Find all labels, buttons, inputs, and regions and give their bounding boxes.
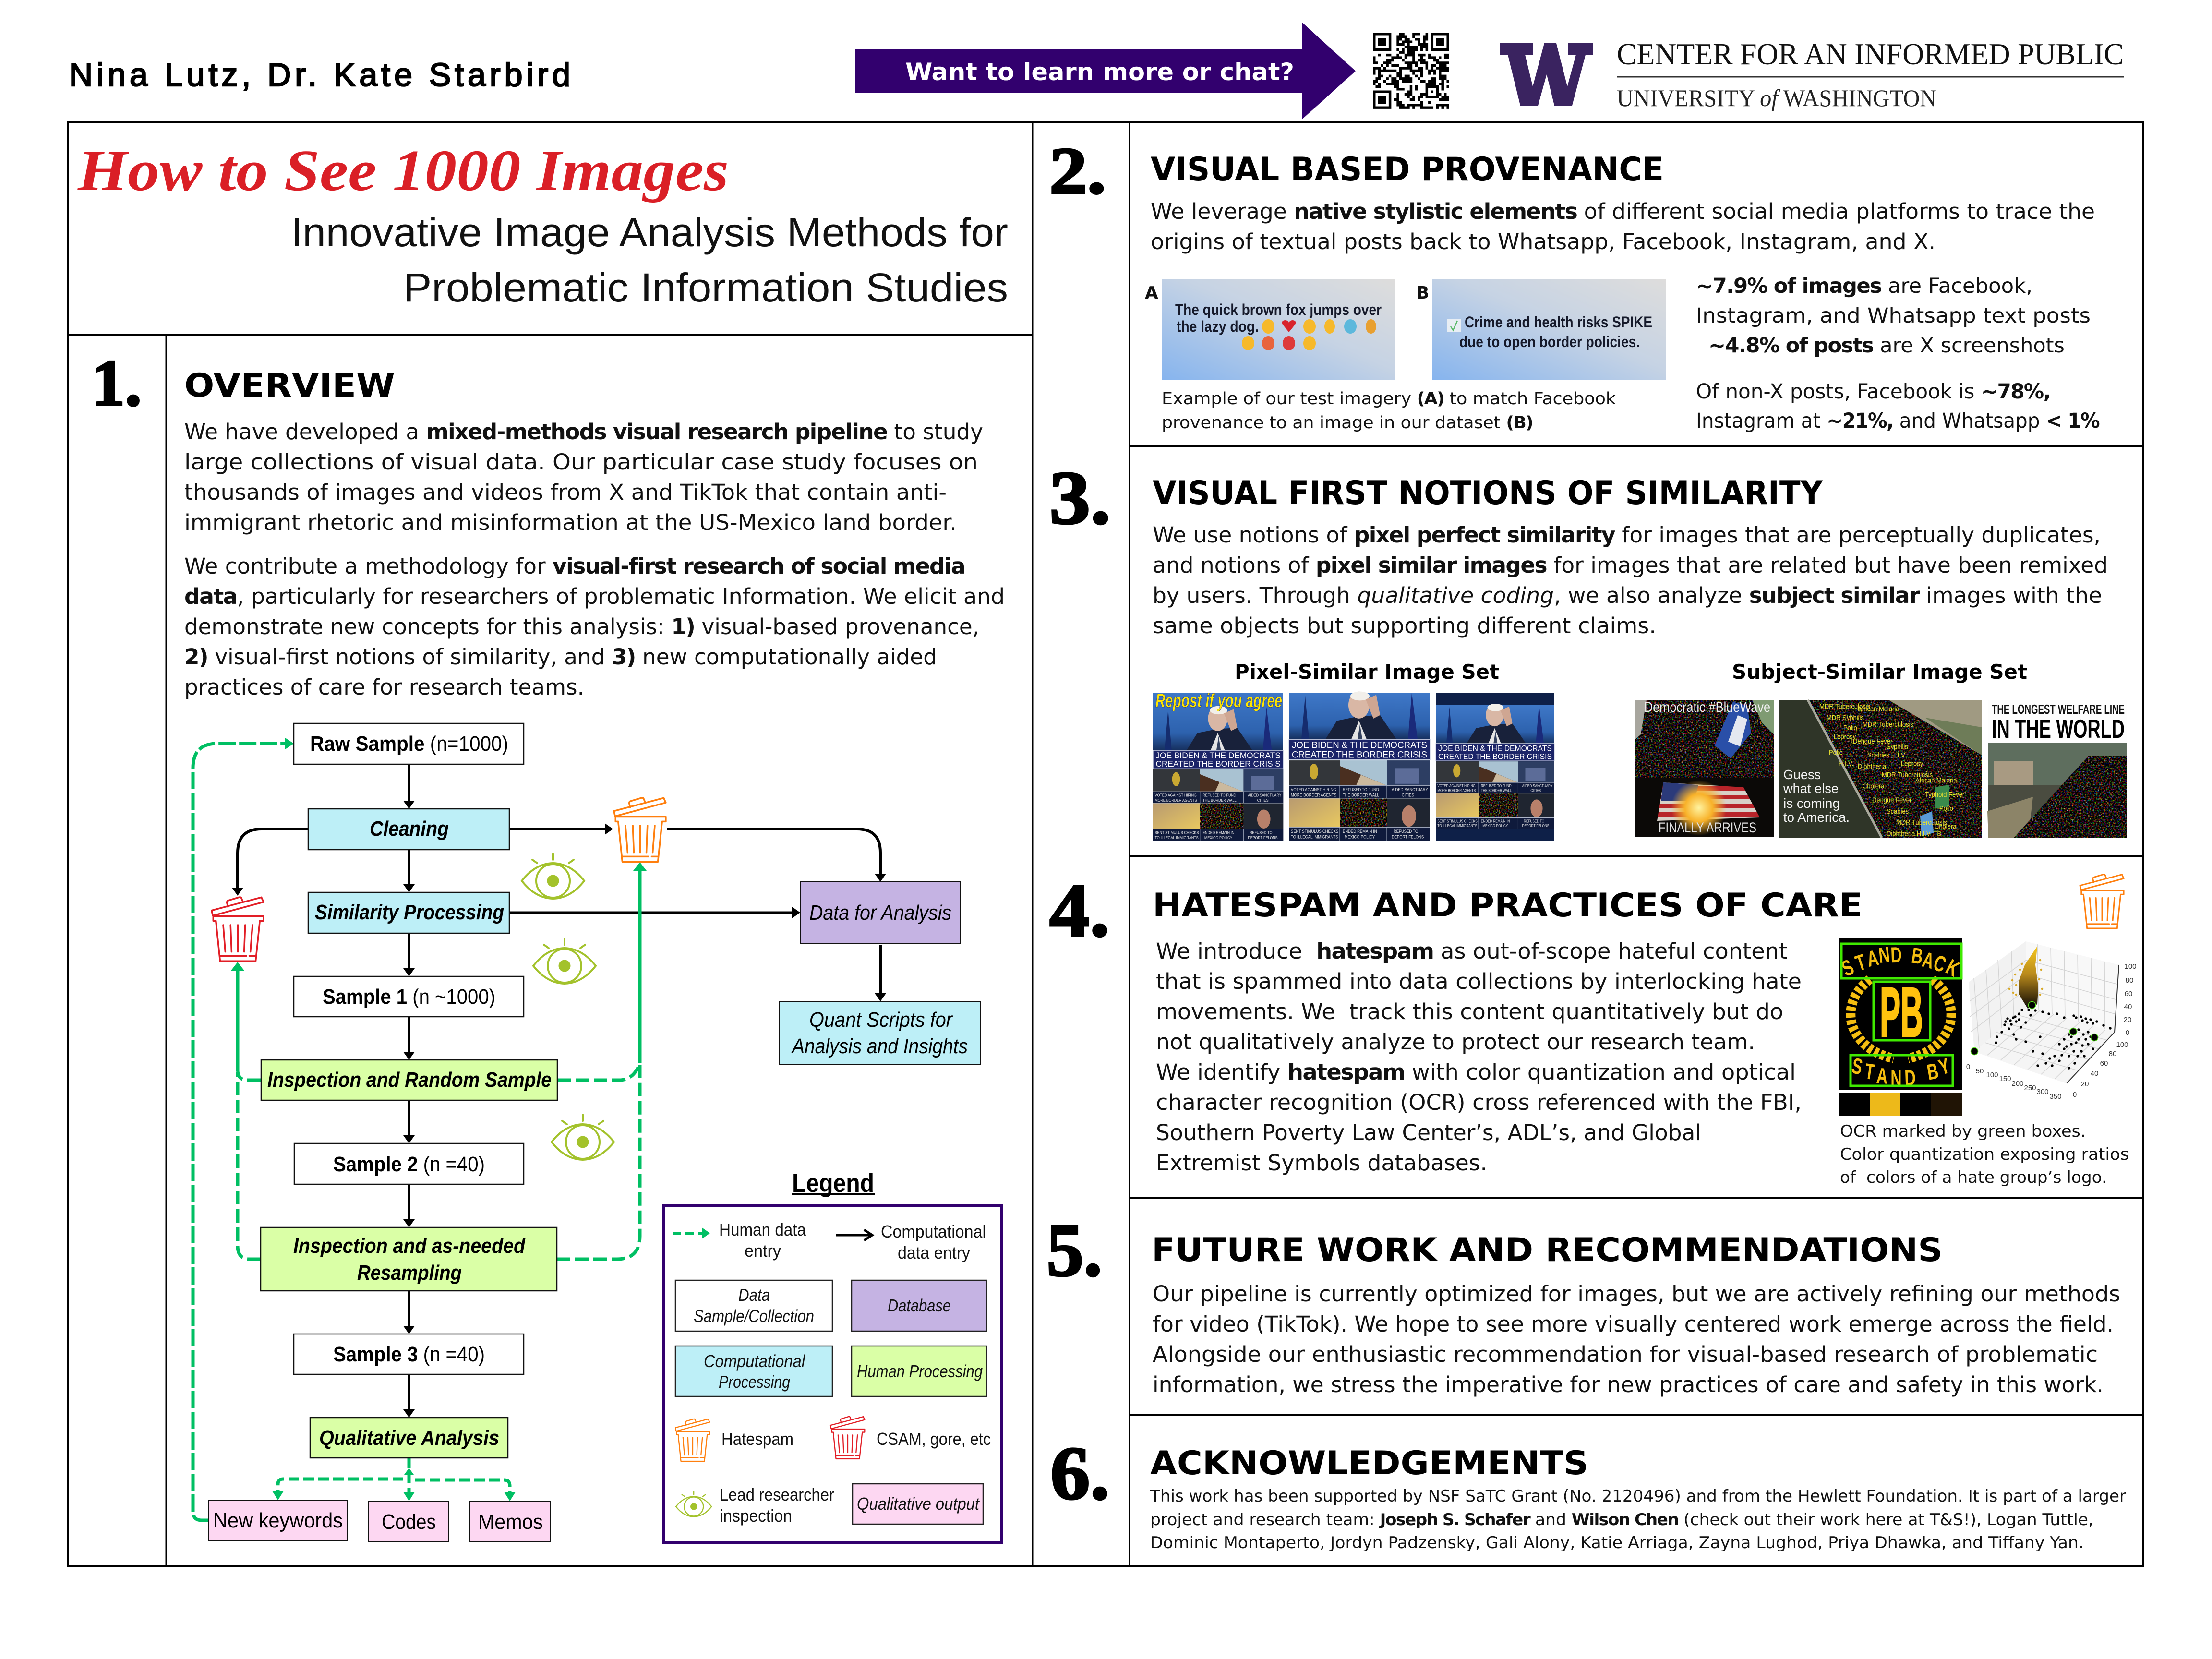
number 2: 2.: [1049, 134, 1106, 207]
chart: 3D color scatter plot: 60: [2125, 990, 2132, 998]
logo lettering: stand back: S: [1838, 955, 1858, 981]
heading: overview: OVERVIEW: [184, 367, 395, 405]
image: poster 1: VOTED AGAINST HIRING: [1155, 793, 1197, 798]
stats: provenance percentages: ~7.9% of images are Facebook,: [1696, 274, 2032, 298]
image: longest welfare line meme: IN THE WORLD: [1992, 714, 2125, 744]
chart: 3D color scatter plot: 0: [2073, 1091, 2077, 1099]
box: new keywords: New keywords: [213, 1509, 343, 1532]
caption: OCR and color quantization: [1840, 1122, 2129, 1187]
image: poster 1: Repost if you agree: [1155, 690, 1282, 711]
text block: future work: Alongside our enthusiastic recommendation for visual-based research of problematic: [1153, 1342, 2098, 1367]
logo lettering: stand back: B: [1910, 943, 1924, 969]
legend: computational processing box: Computational: [704, 1351, 805, 1371]
image: guess what else meme: Dengue Fever: [1853, 737, 1893, 745]
box: qualitative analysis: Qualitative Analysis: [319, 1426, 499, 1450]
heading: pixel-similar image set: Pixel-Similar Image Set: [1235, 660, 1499, 684]
logo lettering: stand back: A: [1920, 947, 1936, 974]
image: poster 3: VOTED AGAINST HIRING: [1437, 783, 1476, 788]
image: guess what else meme: Scabies: [1887, 807, 1909, 815]
chart: 3D color scatter plot: 100: [2124, 962, 2137, 971]
logo: University of Washington W and Center for an Informed Public: CENTER FOR AN INFORMED PUBLIC: [1617, 37, 2124, 71]
icon: eye 2: [533, 938, 596, 984]
image: poster 1: TO ILLEGAL IMMIGRANTS: [1155, 835, 1199, 840]
image: guess what else meme: Polio: [1843, 723, 1857, 732]
legend: lead researcher inspection: inspection: [720, 1506, 792, 1526]
legend: hatespam icon: [675, 1419, 793, 1461]
image: guess what else meme: African Malaria: [1858, 704, 1899, 713]
text block: similarity: by users. Through qualitative coding, we also analyze subject similar images with the: [1153, 583, 2102, 608]
box: sample 2: [294, 1143, 524, 1184]
legend: computational processing box: Processing: [719, 1372, 790, 1392]
image: guess what else meme: Leprosy: [1834, 733, 1856, 741]
number 3: 3.: [1049, 456, 1111, 540]
text block: overview: We contribute a methodology for visual-first research of social media: [184, 553, 965, 579]
flow arrows: green human data entry: [193, 744, 640, 1520]
text block: hatespam: Southern Poverty Law Center’s, ADL’s, and Global: [1156, 1120, 1701, 1145]
logo lettering: stand back: D: [1890, 943, 1902, 968]
text block: overview: practices of care for research teams.: [184, 674, 584, 700]
stats: provenance percentages: ~4.8% of posts are X screenshots: [1708, 334, 2065, 358]
box: data for analysis: [800, 882, 960, 944]
chart: 3D color scatter plot: 250: [2024, 1084, 2036, 1092]
icon: eye 1: [522, 854, 584, 899]
text block: future work: [1153, 1281, 2120, 1397]
chart: 3D color scatter plot: 150: [1999, 1075, 2011, 1083]
stats: provenance percentages: Of non-X posts, Facebook is ~78%,: [1696, 380, 2050, 404]
box: quant scripts: Analysis and Insights: [791, 1034, 968, 1058]
box: inspection and random sample: Inspection and Random Sample: [267, 1068, 552, 1092]
image: guess what else meme: African Malaria: [1915, 776, 1957, 784]
chart: 3D color scatter plot: 40: [2091, 1070, 2098, 1078]
box: similarity processing: [308, 892, 509, 933]
image: poster 3: THE BORDER WALL: [1481, 788, 1512, 793]
image: poster 2: SENT STIMULUS CHECKS: [1291, 829, 1339, 834]
icon: orange trash can: [614, 798, 666, 862]
image: guess what else meme: MDR Tuberculosis: [1819, 702, 1870, 710]
image: guess what else meme: Leprosy: [1901, 759, 1923, 768]
box: sample 3: [294, 1334, 524, 1374]
image: guess what else meme: Guess: [1783, 767, 1821, 782]
legend: [664, 1206, 1002, 1543]
box: similarity processing: Similarity Processing: [315, 901, 504, 924]
image: poster 3: SENT STIMULUS CHECKS: [1437, 819, 1478, 823]
logo lettering: stand back: A: [1876, 1064, 1888, 1089]
legend: qualitative output box: Qualitative output: [857, 1494, 980, 1514]
legend: database box: Database: [888, 1296, 951, 1315]
text block: overview: data, particularly for researchers of problematic Information. We elicit and: [184, 584, 1005, 609]
image: guess what else meme: what else: [1783, 781, 1839, 796]
heading: acknowledgements: ACKNOWLEDGEMENTS: [1150, 1444, 1588, 1482]
color palette swatches: [1839, 1093, 1962, 1116]
image: longest welfare line meme: THE LONGEST WELFARE LINE: [1992, 702, 2125, 717]
heading: future work and recommendations: FUTURE WORK AND RECOMMENDATIONS: [1152, 1231, 1943, 1269]
text block: similarity: same objects but supporting different claims.: [1153, 613, 1656, 638]
flowchart: [193, 723, 981, 1542]
icon: QR code: [1373, 34, 1449, 108]
example image A: the lazy dog.: [1177, 318, 1259, 335]
chart: 3D color scatter plot: 200: [2011, 1080, 2024, 1088]
legend: csam icon: CSAM, gore, etc: [877, 1429, 991, 1449]
text block: acknowledgements: This work has been supported by NSF SaTC Grant (No. 2120496) and from the Hewlett Foundation. It is part of a larger: [1150, 1487, 2126, 1506]
example image B: Crime and health risks SPIKE: [1465, 313, 1652, 331]
text block: similarity: and notions of pixel similar images for images that are related but have been remixed: [1153, 553, 2108, 578]
box: cleaning: [308, 809, 509, 850]
image: poster 3: MEXICO POLICY: [1482, 824, 1508, 828]
arrow: want to learn more: [855, 23, 1356, 119]
title: How to See 1000 Images: [77, 138, 729, 203]
text block: hatespam: that is spammed into data collections by interlocking hate: [1156, 969, 1802, 994]
image: poster 3: REFUSED TO: [1524, 819, 1544, 823]
box: cleaning: Cleaning: [370, 817, 449, 841]
logo lettering: stand back: [1838, 942, 1963, 1091]
text block: provenance: [1151, 199, 2095, 254]
image: guess what else meme: MDR Tuberculosis: [1863, 720, 1913, 728]
image: poster 2: [1289, 692, 1430, 841]
caption: OCR and color quantization: of colors of a hate group’s logo.: [1840, 1168, 2107, 1187]
image: guess what else meme: MDR Tuberculosis: [1882, 770, 1933, 779]
example image B: [1416, 279, 1666, 380]
image: guess what else meme: MDR Syphilis: [1827, 713, 1864, 721]
image: hate group logo with OCR boxes: [1838, 938, 1963, 1116]
logo lettering: stand back: D: [1904, 1066, 1916, 1091]
box: sample 3: Sample 3 (n =40): [333, 1343, 485, 1366]
chart: 3D color scatter plot: [1966, 941, 2137, 1101]
caption: OCR and color quantization: Color quantization exposing ratios: [1840, 1145, 2129, 1164]
box: codes: Codes: [382, 1510, 436, 1534]
text block: hatespam: We identify hatespam with color quantization and optical: [1156, 1059, 1796, 1085]
image: poster 2: MORE BORDER AGENTS: [1291, 793, 1336, 798]
image: guess what else meme: Polio: [1829, 748, 1843, 757]
text block: provenance: We leverage native stylistic elements of different social media platforms to trace the: [1151, 199, 2095, 224]
image: poster 1: DEPORT FELONS: [1248, 835, 1278, 840]
image: guess what else meme: Typhoid Fever: [1925, 790, 1965, 798]
image: poster 2: CREATED THE BORDER CRISIS: [1292, 749, 1427, 760]
image: poster 2: THE BORDER WALL: [1343, 793, 1379, 798]
logo lettering: stand back: C: [1930, 950, 1949, 977]
box: sample 2: Sample 2 (n =40): [333, 1153, 485, 1176]
box: raw sample: Raw Sample (n=1000): [310, 732, 508, 756]
legend: human data entry arrow: [673, 1220, 806, 1261]
image: poster 2: VOTED AGAINST HIRING: [1291, 787, 1336, 792]
image: guess what else meme: to America.: [1783, 810, 1850, 825]
text block: future work: Our pipeline is currently optimized for images, but we are actively refining our methods: [1153, 1281, 2120, 1307]
image: poster 1: CITIES: [1257, 798, 1269, 803]
box: sample 1: [294, 976, 524, 1017]
text block: similarity: We use notions of pixel perfect similarity for images that are perceptually duplicates,: [1153, 522, 2101, 548]
box: inspection and as-needed resampling: Inspection and as-needed: [293, 1234, 526, 1258]
number 4: 4.: [1049, 868, 1110, 952]
box: memos: [470, 1501, 550, 1542]
chart: 3D color scatter plot: 300: [2036, 1088, 2049, 1096]
image: guess what else meme: is coming: [1783, 796, 1840, 811]
heading: visual first notions of similarity: VISUAL FIRST NOTIONS OF SIMILARITY: [1153, 474, 1823, 512]
legend: lead researcher inspection: [676, 1485, 834, 1526]
chart: 3D color scatter plot: 50: [1976, 1067, 1984, 1075]
caption: test imagery: Example of our test imagery (A) to match Facebook: [1162, 389, 1616, 409]
image: poster 3: CREATED THE BORDER CRISIS: [1438, 752, 1552, 761]
box: memos: Memos: [478, 1510, 543, 1534]
number 1: 1.: [92, 346, 142, 420]
image: guess what else meme: MDR Tuberculosis: [1896, 818, 1947, 826]
example image B: due to open border policies.: [1459, 333, 1640, 350]
text block: acknowledgements: project and research team: Joseph S. Schafer and Wilson Chen (check out their work here at T&S!), Logan Tuttle,: [1150, 1510, 2093, 1529]
legend: hatespam icon: Hatespam: [721, 1429, 793, 1449]
number 6: 6.: [1050, 1431, 1110, 1515]
image: poster 1: CREATED THE BORDER CRISIS: [1156, 759, 1281, 769]
image: poster 1: MORE BORDER AGENTS: [1155, 798, 1197, 803]
legend: qualitative output box: [853, 1484, 983, 1524]
logo lettering: stand back: K: [1942, 955, 1963, 982]
legend: computational data entry arrow: data entry: [898, 1243, 970, 1262]
logo lettering: stand back: T: [1852, 950, 1869, 976]
box: data for analysis: Data for Analysis: [809, 901, 951, 925]
example image A: [1145, 279, 1395, 380]
subtitle: Innovative Image Analysis Methods for: [291, 210, 1008, 255]
arrow: want to learn more: Want to learn more or chat?: [905, 58, 1294, 86]
image: guess what else meme: Syphilis: [1887, 743, 1908, 751]
logo lettering: stand back: Y: [1936, 1053, 1953, 1080]
chart: 3D color scatter plot: 60: [2100, 1059, 2108, 1068]
icon: eye 3: [552, 1115, 614, 1160]
image: guess what else meme: Cholera: [1935, 822, 1957, 830]
image: poster 1: SENT STIMULUS CHECKS: [1155, 830, 1199, 835]
stats: provenance percentages: Instagram, and Whatsapp text posts: [1696, 304, 2091, 328]
text block: hatespam: Extremist Symbols databases.: [1156, 1150, 1487, 1176]
text block: acknowledgements: [1150, 1487, 2126, 1552]
image: democratic bluewave meme: [1635, 699, 1774, 837]
image: poster 1: AIDED SANCTUARY: [1248, 793, 1282, 798]
image: guess what else meme: Polio: [1939, 804, 1953, 812]
text block: overview: 2) visual-first notions of similarity, and 3) new computationally aided: [184, 644, 937, 670]
image: poster 3: AIDED SANCTUARY: [1522, 783, 1553, 788]
image: democratic bluewave meme: Democratic #BlueWave: [1644, 699, 1770, 715]
logo lettering: stand back: S: [1850, 1054, 1865, 1080]
chart: 3D color scatter plot: 20: [2124, 1016, 2131, 1024]
text block: overview: [184, 419, 1005, 700]
chart: 3D color scatter plot: 20: [2081, 1080, 2089, 1088]
legend: data sample box: Sample/Collection: [694, 1306, 814, 1326]
image: poster 1: MEXICO POLICY: [1204, 835, 1233, 840]
box: raw sample: [294, 723, 524, 764]
text block: hatespam: not qualitatively analyze to protect our research team.: [1156, 1029, 1755, 1055]
caption: test imagery: [1162, 389, 1616, 433]
image: poster 3: DEPORT FELONS: [1522, 824, 1549, 828]
text block: hatespam: [1156, 938, 1802, 1176]
image: poster 2: DEPORT FELONS: [1392, 834, 1424, 840]
image: guess what else meme: Diphtheria: [1858, 762, 1886, 770]
icon: orange trash can: [2080, 875, 2124, 928]
image: poster 2: CITIES: [1402, 793, 1414, 798]
image: poster 3: ENDED REMAIN IN: [1481, 819, 1510, 823]
text block: overview: large collections of visual data. Our particular case study focuses on: [184, 449, 978, 475]
chart: 3D color scatter plot: 80: [2109, 1050, 2116, 1058]
logo lettering: stand back: N: [1890, 1066, 1902, 1091]
example image B: B: [1416, 283, 1429, 303]
caption: OCR and color quantization: OCR marked by green boxes.: [1840, 1122, 2086, 1141]
box: inspection and as-needed resampling: [261, 1227, 557, 1291]
image: poster 3: MORE BORDER AGENTS: [1437, 788, 1476, 793]
legend: computational data entry arrow: Computational: [881, 1222, 986, 1241]
text block: hatespam: movements. We track this content quantitatively but do: [1156, 999, 1783, 1024]
image: poster 2: MEXICO POLICY: [1345, 834, 1375, 840]
icon: red trash can: [212, 897, 264, 961]
image: poster 3: TO ILLEGAL IMMIGRANTS: [1437, 824, 1477, 828]
subtitle: [291, 210, 1008, 310]
image: poster 2: REFUSED TO: [1394, 829, 1418, 834]
legend heading: Legend: [792, 1169, 874, 1198]
chart: 3D color scatter plot: 80: [2126, 976, 2133, 985]
image: poster 3: REFUSED TO FUND: [1481, 783, 1512, 788]
legend: human processing box: [852, 1346, 986, 1396]
text block: overview: thousands of images and videos from X and TikTok that contain anti-: [184, 480, 947, 505]
image: poster 3: CITIES: [1530, 788, 1541, 793]
image: democratic bluewave meme: FINALLY ARRIVES: [1659, 820, 1756, 836]
image: poster 1: REFUSED TO: [1250, 830, 1272, 835]
legend: computational processing box: [675, 1346, 832, 1396]
text block: future work: for video (TikTok). We hope to see more visually centered work emerge across the field.: [1153, 1311, 2114, 1337]
logo: University of Washington W and Center for an Informed Public: UNIVERSITY of WASHINGTON: [1617, 84, 1936, 111]
caption: test imagery: provenance to an image in our dataset (B): [1162, 413, 1533, 433]
image: guess what else meme: Scabies H.I.V.: [1867, 751, 1906, 759]
text block: overview: demonstrate new concepts for this analysis: 1) visual-based provenance,: [184, 614, 979, 639]
image: guess what else meme: Cholera: [1863, 781, 1885, 790]
image: longest welfare line meme: [1987, 700, 2128, 839]
logo lettering: stand back: N: [1877, 942, 1891, 968]
logo: University of Washington W and Center for an Informed Public: [1500, 37, 2124, 111]
subtitle: Problematic Information Studies: [403, 265, 1008, 310]
image: hate group logo with OCR boxes: PB: [1880, 973, 1923, 1051]
image: guess what else meme: [1779, 700, 1982, 838]
image: guess what else meme: H.I.V.: [1839, 759, 1853, 768]
example image A: A: [1145, 283, 1158, 303]
image: poster 1: THE BORDER WALL: [1202, 798, 1237, 803]
legend: human processing box: Human Processing: [857, 1361, 983, 1381]
chart: 3D color scatter plot: 0: [1966, 1063, 1970, 1071]
image: poster 3: JOE BIDEN & THE DEMOCRATS: [1438, 745, 1552, 753]
text block: hatespam: character recognition (OCR) cross referenced with the FBI,: [1156, 1090, 1802, 1115]
chart: 3D color scatter plot: 100: [2116, 1041, 2128, 1049]
legend: csam icon: [830, 1417, 991, 1459]
text block: acknowledgements: Dominic Montaperto, Jordyn Padzensky, Gali Alony, Katie Arriaga, Zayna Lughod, Priya Dhawka, and Tiffany Yan.: [1150, 1533, 2084, 1552]
logo lettering: stand back: T: [1863, 1059, 1876, 1085]
box: codes: [369, 1501, 449, 1542]
logo lettering: stand back: B: [1925, 1059, 1940, 1085]
stats: provenance percentages: [1696, 274, 2099, 433]
box: new keywords: [208, 1500, 348, 1540]
image: poster 2: REFUSED TO FUND: [1343, 787, 1379, 792]
legend: human data entry arrow: Human data: [719, 1220, 806, 1239]
flow arrows: black: [238, 764, 880, 1411]
box: quant scripts: [780, 1001, 981, 1065]
image: poster 2: TO ILLEGAL IMMIGRANTS: [1291, 834, 1338, 840]
legend: human data entry arrow: entry: [745, 1241, 781, 1261]
image: guess what else meme: Diphtheria H.I.V. TB: [1887, 830, 1941, 838]
chart: 3D color scatter plot: 350: [2049, 1093, 2062, 1101]
legend: database box: [852, 1280, 986, 1331]
heading: visual based provenance: VISUAL BASED PROVENANCE: [1151, 151, 1664, 189]
text block: future work: information, we stress the imperative for new practices of care and safety in this work.: [1153, 1372, 2104, 1397]
example image A: The quick brown fox jumps over: [1175, 301, 1382, 318]
logo lettering: stand back: A: [1865, 946, 1881, 972]
legend: computational data entry arrow: [836, 1222, 986, 1262]
heading: subject-similar image set: Subject-Similar Image Set: [1732, 660, 2027, 684]
image: poster 1: JOE BIDEN & THE DEMOCRATS: [1156, 751, 1281, 760]
legend: data sample box: Data: [738, 1285, 770, 1305]
image: poster 3: [1436, 693, 1554, 841]
chart: 3D color scatter plot: 0: [2126, 1029, 2129, 1037]
stats: provenance percentages: Instagram at ~21%, and Whatsapp < 1%: [1696, 409, 2099, 433]
box: sample 1: Sample 1 (n ~1000): [323, 985, 495, 1009]
image: poster 1: [1153, 690, 1283, 841]
image: guess what else meme: Dengue Fever: [1872, 796, 1912, 804]
chart: 3D color scatter plot: 40: [2124, 1003, 2132, 1011]
chart: 3D color scatter plot: 100: [1986, 1071, 1998, 1079]
text block: overview: immigrant rhetoric and misinformation at the US-Mexico land border.: [184, 510, 957, 535]
image: poster 1: REFUSED TO FUND: [1202, 793, 1236, 798]
image: poster 1: ENDED REMAIN IN: [1202, 830, 1235, 835]
text block: overview: We have developed a mixed-methods visual research pipeline to study: [184, 419, 983, 445]
image: poster 2: AIDED SANCTUARY: [1392, 787, 1428, 792]
text block: provenance: origins of textual posts back to Whatsapp, Facebook, Instagram, and X.: [1151, 229, 1936, 254]
text block: hatespam: We introduce hatespam as out-of-scope hateful content: [1156, 938, 1788, 964]
box: inspection and random sample: [261, 1060, 557, 1100]
box: inspection and as-needed resampling: Resampling: [357, 1261, 462, 1285]
author names: Nina Lutz, Dr. Kate Starbird: [69, 57, 570, 93]
box: quant scripts: Quant Scripts for: [809, 1008, 953, 1032]
number 5: 5.: [1046, 1208, 1102, 1292]
heading: hatespam and practices of care: HATESPAM AND PRACTICES OF CARE: [1153, 887, 1863, 925]
box: qualitative analysis: [310, 1418, 508, 1458]
image: poster 2: JOE BIDEN & THE DEMOCRATS: [1292, 739, 1427, 750]
legend: lead researcher inspection: Lead researcher: [720, 1485, 834, 1504]
legend: data sample box: [675, 1280, 832, 1331]
image: poster 2: ENDED REMAIN IN: [1343, 829, 1377, 834]
text block: similarity: [1153, 522, 2108, 638]
